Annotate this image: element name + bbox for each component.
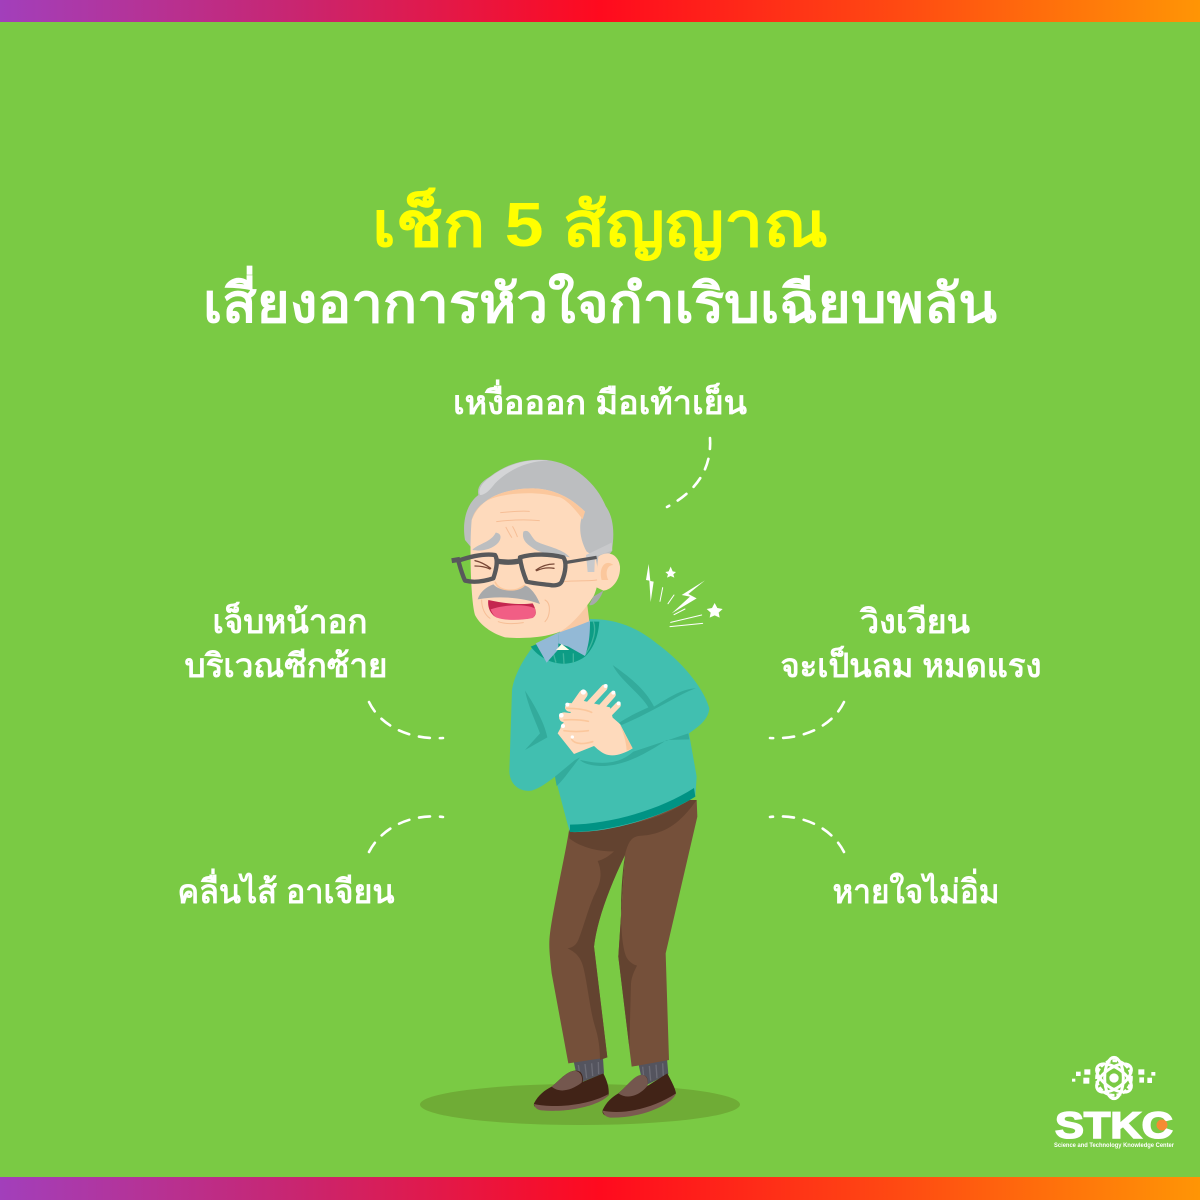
collar	[531, 621, 599, 664]
top gradient bar	[0, 0, 1200, 22]
symptom label: chest pain	[184, 601, 388, 684]
title: เช็ก 5 สัญญาณ	[372, 187, 828, 261]
legs and shoes	[534, 800, 697, 1118]
eyebrows	[473, 533, 501, 551]
pain sparks	[646, 564, 723, 618]
symptom label: dizziness: วิงเวียน	[860, 603, 970, 640]
hair	[464, 460, 613, 572]
forehead wrinkles	[482, 511, 597, 624]
sweater	[509, 619, 709, 832]
hands	[558, 684, 633, 755]
ground shadow	[420, 1084, 740, 1125]
symptom label: breathless: หายใจไม่อิ่ม	[832, 868, 1000, 910]
logo dot	[1156, 1120, 1168, 1130]
symptom label: nausea: คลื่นไส้ อาเจียน	[178, 868, 395, 910]
symptom label: chest pain: บริเวณซีกซ้าย	[184, 647, 388, 684]
mouth	[488, 600, 536, 620]
man illustration	[452, 460, 723, 1118]
dashed connectors	[369, 438, 844, 852]
sideburn and temple	[586, 543, 612, 572]
bottom gradient bar	[0, 1177, 1200, 1200]
symptom label: chest pain: เจ็บหน้าอก	[212, 601, 368, 640]
nose	[495, 582, 525, 590]
neck	[560, 600, 590, 647]
head	[452, 460, 620, 647]
face	[471, 488, 598, 638]
subtitle: เสี่ยงอาการหัวใจกำเริบเฉียบพลัน	[203, 265, 997, 334]
glasses	[452, 555, 597, 585]
logo wordmark: STKC	[1055, 1105, 1173, 1146]
logo atom icon	[1072, 1057, 1155, 1099]
ear	[595, 553, 620, 591]
logo: STKC	[1054, 1057, 1175, 1149]
symptom label: sweating: เหงื่อออก มือเท้าเย็น	[453, 379, 747, 421]
logo tagline: Science and Technology Knowledge Center	[1054, 1143, 1175, 1149]
impact lines	[660, 588, 703, 627]
closed eyes	[475, 561, 554, 571]
symptom label: dizziness	[780, 603, 1042, 684]
moustache	[478, 584, 540, 604]
symptom label: dizziness: จะเป็นลม หมดแรง	[780, 645, 1042, 684]
